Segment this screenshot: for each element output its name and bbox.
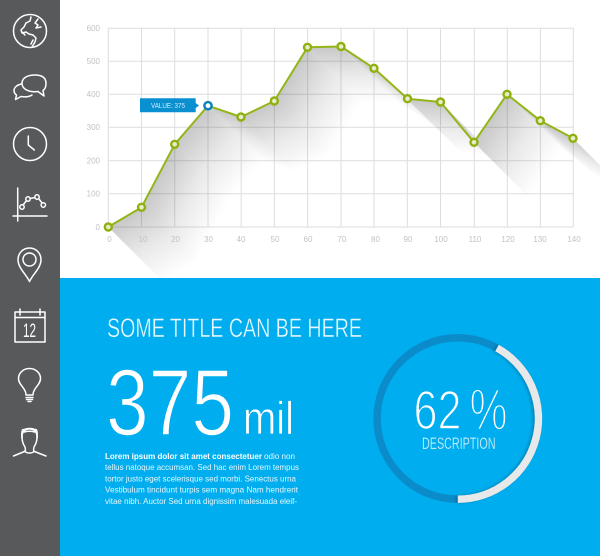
icon: person bbox=[14, 428, 46, 456]
x axis labels bbox=[107, 235, 581, 244]
y axis labels: 100 bbox=[87, 190, 101, 198]
panel: blue stats bbox=[60, 278, 600, 556]
x axis labels: 30 bbox=[204, 235, 213, 244]
body text bbox=[105, 451, 299, 506]
panel: chart background bbox=[60, 0, 600, 278]
icon: light bulb bbox=[18, 369, 40, 402]
x axis labels: 100 bbox=[434, 235, 448, 244]
y axis labels: 600 bbox=[87, 24, 101, 33]
icon: calendar: 12 bbox=[23, 321, 36, 342]
donut value bbox=[414, 378, 508, 442]
body text: tellus natoque accumsan. Sed hac enim Lorem tempus bbox=[105, 462, 299, 472]
long shadow under line bbox=[108, 46, 600, 282]
x axis labels: 0 bbox=[107, 235, 112, 244]
body text: vitae nibh. Auctor Sed urna dignissim malesuada eleif- bbox=[105, 496, 297, 506]
tooltip: value 375 bbox=[140, 98, 199, 112]
icon: globe bbox=[14, 14, 46, 48]
tooltip: value 375: VALUE: 375 bbox=[151, 103, 185, 110]
y axis labels: 500 bbox=[87, 57, 101, 66]
y axis labels bbox=[87, 24, 101, 232]
icon: line chart bbox=[13, 188, 47, 221]
x axis labels: 60 bbox=[304, 235, 313, 244]
body text: Vestibulum tincidunt turpis sem magna Nam hendrerit bbox=[105, 485, 299, 495]
y axis labels: 0 bbox=[96, 223, 101, 232]
panel: icon sidebar bbox=[0, 0, 60, 556]
unit: mil bbox=[243, 392, 294, 444]
chart grid bbox=[108, 28, 573, 227]
donut chart: 62 percent bbox=[377, 338, 538, 499]
body text: odio non bbox=[264, 451, 295, 461]
x axis labels: 140 bbox=[567, 235, 581, 244]
x axis labels: 70 bbox=[338, 235, 347, 244]
x axis labels: 120 bbox=[501, 235, 515, 244]
x axis labels: 130 bbox=[533, 235, 547, 244]
icon: calendar bbox=[15, 309, 45, 342]
x axis labels: 80 bbox=[371, 235, 380, 244]
big number: 375 bbox=[106, 350, 234, 456]
line chart series bbox=[108, 46, 573, 227]
x axis labels: 50 bbox=[271, 235, 280, 244]
body text: tortor justo eget scelerisque sed morbi. Senectus urna bbox=[105, 473, 296, 483]
y axis labels: 300 bbox=[87, 123, 101, 132]
x axis labels: 40 bbox=[237, 235, 246, 244]
icon: clock bbox=[14, 128, 46, 160]
title: SOME TITLE CAN BE HERE bbox=[107, 313, 362, 343]
x axis labels: 110 bbox=[469, 235, 482, 244]
x axis labels: 90 bbox=[404, 235, 413, 244]
x axis labels: 20 bbox=[171, 235, 180, 244]
y axis labels: 200 bbox=[87, 156, 101, 166]
icon: location pin bbox=[18, 248, 41, 282]
body text: Lorem ipsum dolor sit amet consectetuer bbox=[105, 451, 263, 461]
donut description: DESCRIPTION bbox=[422, 435, 496, 453]
data point markers bbox=[105, 43, 577, 230]
icon: speech bubbles bbox=[14, 75, 46, 100]
highlighted data point bbox=[204, 102, 212, 109]
donut value: 62 bbox=[414, 379, 462, 441]
y axis labels: 400 bbox=[87, 90, 101, 99]
donut value: % bbox=[470, 378, 508, 442]
x axis labels: 10 bbox=[139, 235, 148, 244]
